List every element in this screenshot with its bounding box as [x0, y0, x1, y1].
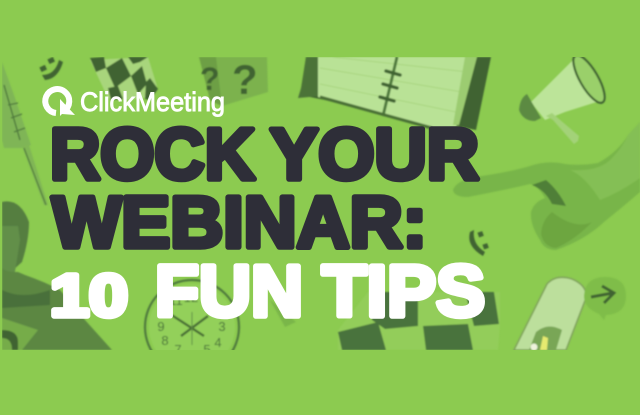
icon: wall clock: 11: [169, 293, 183, 308]
infographic banner: [2, 57, 640, 350]
title line 1: [50, 115, 479, 195]
icon: wall clock: 7: [174, 342, 182, 357]
icon: question mark die: ?: [232, 56, 258, 103]
icon: wall clock: 4: [214, 335, 222, 350]
icon: smiley right: [469, 230, 489, 256]
title line 3: [50, 252, 485, 332]
icon: wall clock: 3: [218, 319, 226, 334]
icon: checkered flag bottom: [338, 292, 500, 350]
icon: smiley top left: [39, 57, 63, 80]
icon: logo mark: [45, 89, 75, 116]
title line 1: YOUR: [270, 115, 479, 195]
icon: wall clock: 12: [184, 290, 198, 305]
icon: thermometer: [2, 62, 48, 205]
logo wordmark: ClickMeeting: [80, 87, 225, 117]
logo: ClickMeeting: [45, 87, 225, 117]
icon: small flag: [271, 302, 296, 327]
figure: man: [2, 201, 112, 350]
icon: pointing hand: [453, 122, 640, 250]
icon: checkered flag top: [90, 57, 158, 100]
icon: wall clock: 5: [203, 342, 211, 357]
icon: wall clock: 8: [161, 333, 169, 348]
icon: megaphone: [519, 51, 610, 144]
icon: question mark die: [199, 56, 268, 106]
illustration layer: [2, 51, 640, 374]
icon: question mark die: ?: [200, 61, 220, 97]
title: [50, 115, 485, 332]
title line 3: 10: [50, 263, 128, 329]
icon: planner: [298, 57, 491, 130]
icon: wall clock: [143, 278, 241, 350]
icon: arrow speech bubble: [584, 277, 626, 320]
icon: test tube: [514, 277, 586, 350]
icon: wall clock: 9: [157, 319, 165, 334]
title line 3: FUN: [155, 252, 303, 332]
title line 3: TIPS: [322, 252, 485, 332]
title line 1: ROCK: [50, 115, 255, 195]
title line 2: WEBINAR:: [52, 183, 427, 263]
